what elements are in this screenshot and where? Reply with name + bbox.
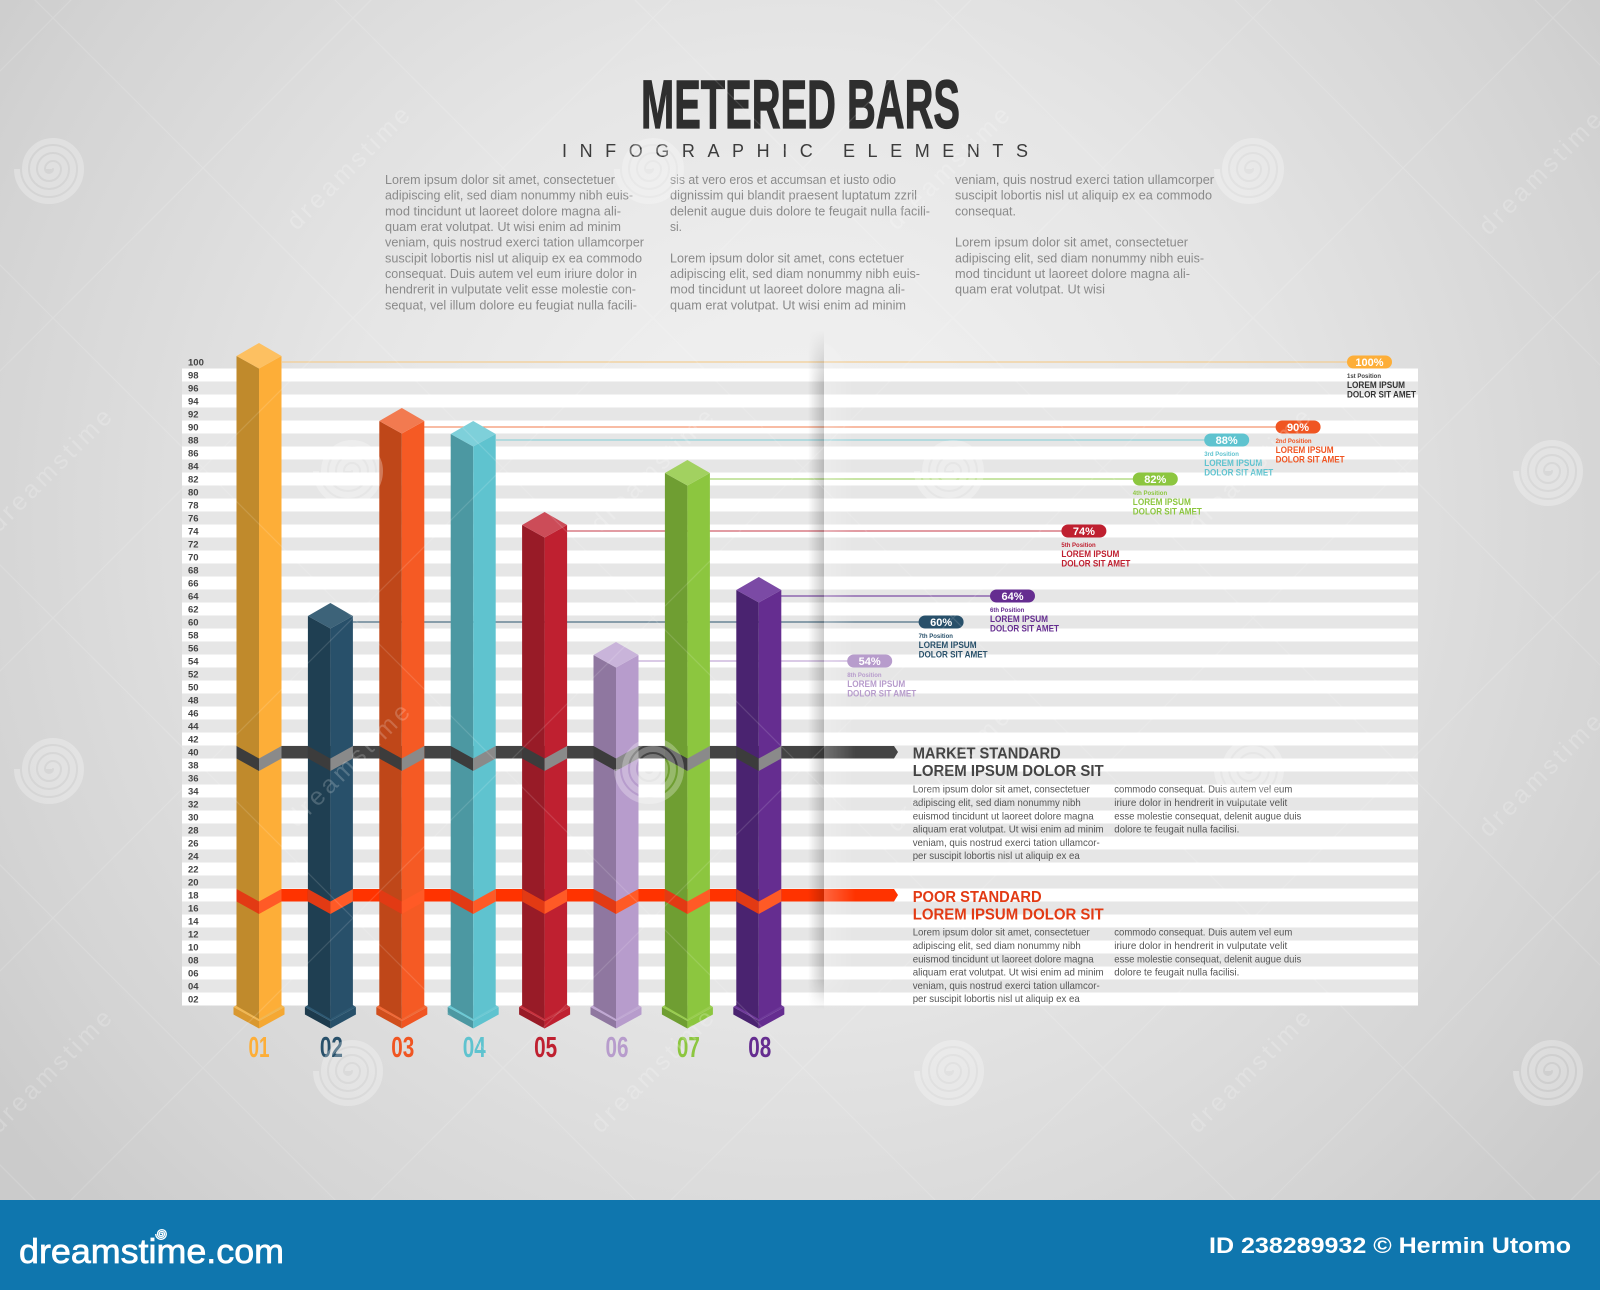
callout: 60% seventh position: 60% [930, 617, 952, 629]
market standard text block: esse molestie consequat, delenit augue duis [1114, 810, 1301, 822]
y axis scale: 88 [188, 435, 199, 446]
y axis scale: 20 [188, 877, 199, 888]
callout: 88% third position [1204, 434, 1274, 478]
poor standard text block: euismod tincidunt ut laoreet dolore magna [913, 953, 1094, 965]
intro text: column 2: sis at vero eros et accumsan et iusto odio [670, 173, 896, 187]
intro text: column 3 [955, 173, 1214, 297]
callout: 82% fourth position: LOREM IPSUM [1133, 497, 1191, 507]
market standard band [237, 746, 898, 758]
y axis scale: 02 [188, 994, 199, 1005]
callout: 88% third position: 88% [1216, 435, 1238, 447]
y axis scale: 56 [188, 643, 199, 654]
y axis scale: 12 [188, 929, 199, 940]
callout: 54% eighth position: DOLOR SIT AMET [847, 688, 917, 698]
callout: 64% sixth position: 6th Position [990, 608, 1025, 614]
y axis scale: 52 [188, 669, 199, 680]
market standard text block: adipiscing elit, sed diam nonummy nibh [913, 797, 1081, 809]
y axis scale: 92 [188, 409, 199, 420]
bar numbers: 07 [677, 1032, 700, 1064]
poor standard text block: iriure dolor in hendrerit in vulputate velit [1114, 940, 1287, 952]
y axis scale: 76 [188, 513, 199, 524]
y axis scale: 06 [188, 968, 199, 979]
bar 03: 90 [376, 408, 427, 1028]
callout: 64% sixth position: 64% [1001, 591, 1024, 603]
market standard text block [913, 746, 1301, 862]
y axis scale: 24 [188, 851, 199, 862]
y axis scale: 68 [188, 565, 199, 576]
callout: 82% fourth position: 4th Position [1133, 491, 1167, 497]
y axis scale: 96 [188, 383, 199, 394]
callout: 100% first position: 100% [1355, 357, 1384, 369]
intro text: column 3: mod tincidunt ut laoreet dolore magna ali- [955, 267, 1190, 281]
y axis scale: 54 [188, 656, 199, 667]
poor standard band [237, 889, 898, 902]
poor standard text block: aliquam erat volutpat. Ut wisi enim ad minim [913, 967, 1104, 979]
callout: 74% fifth position: DOLOR SIT AMET [1061, 558, 1131, 568]
callout: 74% fifth position [1061, 524, 1131, 568]
callout: 60% seventh position [919, 616, 988, 660]
bar 01: 100 [234, 343, 284, 1028]
callout: 74% fifth position: 74% [1073, 526, 1095, 538]
y axis scale: 72 [188, 539, 199, 550]
title: METERED BARS [641, 66, 960, 143]
callout: 64% sixth position [990, 590, 1059, 634]
intro text: column 2: quam erat volutpat. Ut wisi enim ad minim [670, 298, 906, 312]
poor standard text block: POOR STANDARD [913, 889, 1042, 906]
y axis scale: 44 [188, 721, 199, 732]
y axis scale: 28 [188, 825, 199, 836]
intro text: column 2: si. [670, 220, 682, 234]
poor standard text block: adipiscing elit, sed diam nonummy nibh [913, 940, 1081, 952]
intro text: column 2: adipiscing elit, sed diam nonummy nibh euis- [670, 267, 920, 281]
callout: 54% eighth position: 54% [859, 656, 881, 668]
intro text: column 1: veniam, quis nostrud exerci tation ullamcorper [385, 236, 644, 250]
callout: 54% eighth position: LOREM IPSUM [847, 679, 905, 689]
y axis scale: 34 [188, 786, 199, 797]
y axis scale: 60 [188, 617, 199, 628]
watermark wordmarks: dreamstime [881, 101, 1016, 236]
callout: 100% first position: DOLOR SIT AMET [1347, 390, 1416, 400]
market standard text block: dolore te feugait nulla facilisi. [1114, 824, 1239, 836]
callout: 90% second position: LOREM IPSUM [1276, 445, 1334, 455]
callout: 74% fifth position: LOREM IPSUM [1061, 549, 1119, 559]
bar numbers: 06 [606, 1032, 628, 1064]
y axis scale: 90 [188, 422, 199, 433]
callout: 88% third position: DOLOR SIT AMET [1204, 468, 1274, 478]
callout: 82% fourth position: 82% [1144, 474, 1167, 486]
y axis scale: 10 [188, 942, 199, 953]
callout: 60% seventh position: 7th Position [919, 634, 953, 640]
intro text: column 1: consequat. Duis autem vel eum iriure dolor in [385, 267, 637, 281]
bar 05: 74 [519, 512, 570, 1028]
intro text: column 3: veniam, quis nostrud exerci tation ullamcorper [955, 173, 1214, 187]
y axis scale: 94 [188, 396, 199, 407]
y axis scale: 64 [188, 591, 199, 602]
footer logo: dreamstime.com [19, 1233, 284, 1271]
poor standard text block: esse molestie consequat, delenit augue duis [1114, 953, 1301, 965]
intro text: column 1: quam erat volutpat. Ut wisi enim ad minim [385, 220, 621, 234]
subtitle: INFOGRAPHIC ELEMENTS [562, 141, 1028, 161]
poor standard text block: veniam, quis nostrud exerci tation ullamcor- [913, 980, 1100, 992]
market standard text block: euismod tincidunt ut laoreet dolore magna [913, 810, 1094, 822]
bar 08: 64 [733, 577, 784, 1028]
callout: 82% fourth position: DOLOR SIT AMET [1133, 506, 1202, 516]
y axis scale: 48 [188, 695, 199, 706]
callout: 100% first position: LOREM IPSUM [1347, 380, 1405, 390]
bar numbers: 03 [391, 1032, 414, 1064]
callout: 60% seventh position: DOLOR SIT AMET [919, 650, 988, 660]
y axis scale: 30 [188, 812, 199, 823]
chart stripes [182, 368, 1418, 1006]
intro text: column 3: suscipit lobortis nisl ut aliquip ex ea commodo [955, 189, 1212, 203]
watermark wordmarks: dreamstime [1182, 1004, 1317, 1139]
y axis scale: 22 [188, 864, 199, 875]
poor standard text block: Lorem ipsum dolor sit amet, consectetuer [913, 927, 1090, 939]
intro text: column 3: Lorem ipsum dolor sit amet, consectetuer [955, 236, 1188, 250]
bar 02: 60 [305, 603, 356, 1028]
intro text: column 1: suscipit lobortis nisl ut aliquip ex ea commodo [385, 251, 642, 265]
callout: 64% sixth position: LOREM IPSUM [990, 614, 1048, 624]
bar 07: 82 [662, 460, 713, 1028]
y axis scale: 74 [188, 526, 199, 537]
callout: 90% second position: DOLOR SIT AMET [1276, 454, 1345, 464]
market standard text block: veniam, quis nostrud exerci tation ullamcor- [913, 837, 1100, 849]
intro text: column 1: Lorem ipsum dolor sit amet, consectetuer [385, 173, 615, 187]
watermark wordmarks: dreamstime [881, 703, 1016, 838]
callout: 100% first position: 1st Position [1347, 374, 1381, 380]
callout: 54% eighth position: 8th Position [847, 673, 882, 679]
y axis scale: 40 [188, 747, 199, 758]
footer credit: ID 238289932 © Hermin Utomo [1209, 1233, 1571, 1258]
poor standard text block: commodo consequat. Duis autem vel eum [1114, 927, 1293, 939]
footer bar [0, 1200, 1600, 1290]
callout: 100% first position [1347, 356, 1416, 400]
intro text: column 2 [670, 173, 930, 312]
y axis scale: 86 [188, 448, 199, 459]
market standard text block: Lorem ipsum dolor sit amet, consectetuer [913, 784, 1090, 796]
bar numbers: 01 [248, 1032, 270, 1064]
callout: 90% second position [1276, 420, 1345, 464]
intro text: column 2: dignissim qui blandit praesent luptatum zzril [670, 189, 917, 203]
y axis scale: 80 [188, 487, 199, 498]
y axis scale: 18 [188, 890, 199, 901]
intro text: column 3: quam erat volutpat. Ut wisi [955, 283, 1105, 297]
y axis scale: 08 [188, 955, 199, 966]
callout: 88% third position: LOREM IPSUM [1204, 458, 1262, 468]
y axis scale: 38 [188, 760, 199, 771]
intro text: column 2: mod tincidunt ut laoreet dolore magna ali- [670, 283, 905, 297]
poor standard text block: per suscipit lobortis nisl ut aliquip ex ea [913, 993, 1080, 1005]
intro text: column 2: Lorem ipsum dolor sit amet, cons ectetuer [670, 251, 904, 265]
watermark wordmarks: dreamstime [585, 403, 720, 538]
y axis scale: 46 [188, 708, 199, 719]
bar numbers: 08 [748, 1032, 771, 1064]
intro text: column 3: consequat. [955, 204, 1016, 218]
callout: 88% third position: 3rd Position [1204, 452, 1239, 458]
market standard text block: per suscipit lobortis nisl ut aliquip ex ea [913, 850, 1080, 862]
y axis scale: 42 [188, 734, 199, 745]
y axis scale: 26 [188, 838, 199, 849]
y axis scale: 98 [188, 370, 199, 381]
intro text: column 1: adipiscing elit, sed diam nonummy nibh euis- [385, 189, 633, 203]
callout: 54% eighth position [847, 654, 917, 698]
poor standard text block: LOREM IPSUM DOLOR SIT [913, 906, 1104, 924]
y axis scale: 100 [188, 357, 204, 368]
y axis scale: 62 [188, 604, 199, 615]
poor standard text block [913, 889, 1301, 1005]
intro text: column 1 [385, 173, 644, 312]
y axis scale: 58 [188, 630, 199, 641]
bar 06: 54 [590, 642, 642, 1028]
callout: 64% sixth position: DOLOR SIT AMET [990, 624, 1059, 634]
callout: 90% second position: 2nd Position [1276, 439, 1312, 445]
y axis scale: 16 [188, 903, 199, 914]
y axis scale: 78 [188, 500, 199, 511]
y axis scale: 66 [188, 578, 199, 589]
market standard text block: commodo consequat. Duis autem vel eum [1114, 784, 1293, 796]
callout: 90% second position: 90% [1287, 422, 1309, 434]
market standard text block: iriure dolor in hendrerit in vulputate velit [1114, 797, 1287, 809]
watermark wordmarks: dreamstime [585, 1004, 720, 1139]
intro text: column 2: delenit augue duis dolore te feugait nulla facili- [670, 204, 930, 218]
watermark wordmarks: dreamstime [281, 698, 416, 833]
y axis scale: 70 [188, 552, 199, 563]
watermark wordmarks: dreamstime [1182, 403, 1317, 538]
callout: 60% seventh position: LOREM IPSUM [919, 640, 977, 650]
y axis scale: 04 [188, 981, 199, 992]
y axis scale: 82 [188, 474, 199, 485]
intro text: column 1: mod tincidunt ut laoreet dolore magna ali- [385, 204, 621, 218]
page fold shadow [810, 340, 852, 1004]
market standard text block: aliquam erat volutpat. Ut wisi enim ad minim [913, 824, 1104, 836]
bar numbers [248, 1032, 771, 1064]
intro text: column 1: sequat, vel illum dolore eu feugiat nulla facili- [385, 298, 637, 312]
watermark wordmarks: dreamstime [281, 101, 416, 236]
bar numbers: 02 [320, 1032, 343, 1064]
y axis scale: 32 [188, 799, 199, 810]
value leader lines [282, 362, 1350, 661]
watermark spirals [17, 141, 1580, 1103]
callout: 74% fifth position: 5th Position [1061, 543, 1096, 549]
y axis scale: 36 [188, 773, 199, 784]
bar numbers: 05 [534, 1032, 557, 1064]
callout: 82% fourth position [1133, 472, 1202, 516]
y axis scale: 14 [188, 916, 199, 927]
bar numbers: 04 [463, 1032, 486, 1064]
y axis scale [188, 357, 204, 1005]
y axis scale: 84 [188, 461, 199, 472]
bar 04: 88 [448, 421, 499, 1028]
poor standard text block: dolore te feugait nulla facilisi. [1114, 967, 1239, 979]
y axis scale: 50 [188, 682, 199, 693]
intro text: column 3: adipiscing elit, sed diam nonummy nibh euis- [955, 251, 1204, 265]
market standard text block: LOREM IPSUM DOLOR SIT [913, 763, 1104, 780]
intro text: column 1: hendrerit in vulputate velit esse molestie con- [385, 283, 636, 297]
market standard text block: MARKET STANDARD [913, 746, 1061, 762]
footer logo spiral [156, 1230, 166, 1239]
